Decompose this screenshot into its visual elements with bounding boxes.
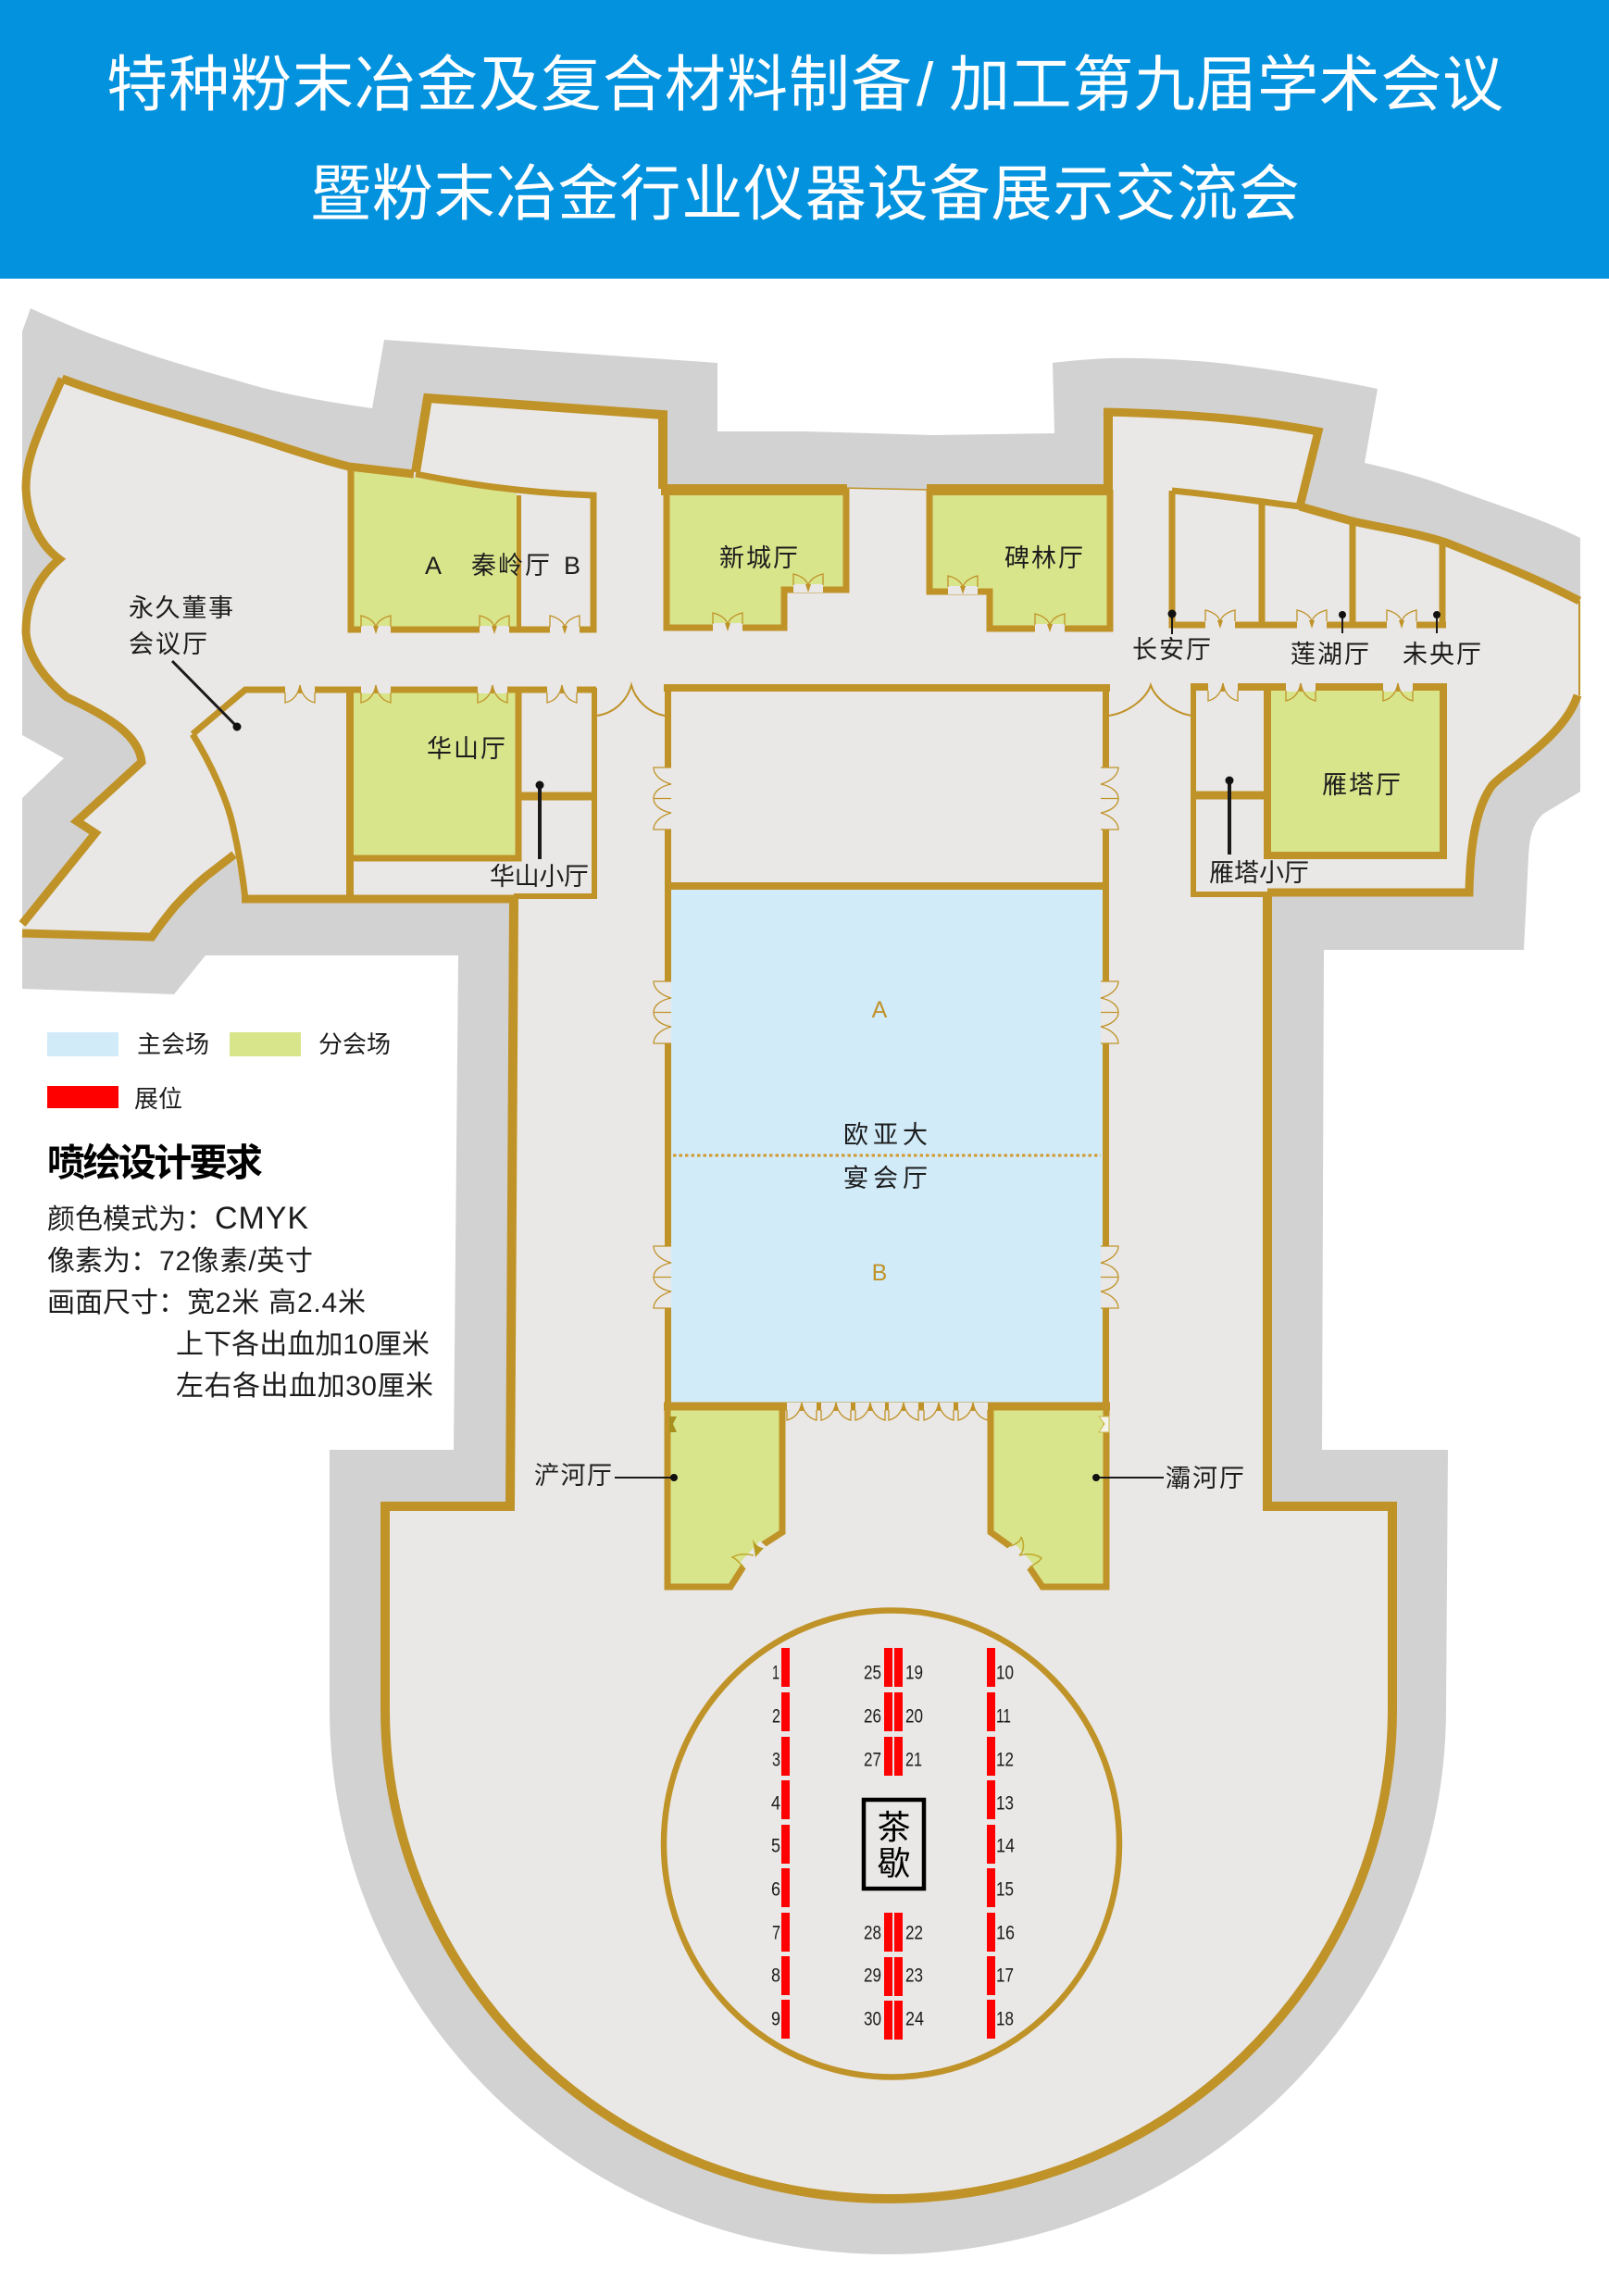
- room fill: 华山厅: [351, 688, 518, 856]
- label: 永久董事会议厅: 永久董事: [129, 594, 233, 622]
- label: 秦岭厅 A B: B: [564, 552, 580, 580]
- requirements list: 72像素/英寸: [159, 1246, 313, 1277]
- booth numbers: 21: [905, 1750, 922, 1770]
- booth numbers: 4: [771, 1792, 780, 1815]
- legend: breakout venue: 分会场: [318, 1030, 391, 1058]
- booth numbers: 14: [996, 1835, 1015, 1857]
- title line 1: 特种粉末冶金及复合材料制备: [106, 50, 912, 119]
- label: 浐河厅: 浐河厅: [534, 1462, 612, 1490]
- label: 华山小厅: 华山小厅: [490, 863, 589, 891]
- legend: main venue: [47, 1030, 209, 1058]
- booth numbers: 1: [772, 1663, 780, 1683]
- print requirements: [47, 1142, 433, 1402]
- room fill: 浐河厅: [667, 1406, 782, 1587]
- label: 永久董事会议厅: 会议厅: [129, 630, 207, 658]
- green breakout rooms: [351, 468, 1441, 1587]
- label: hall A: A: [872, 997, 888, 1023]
- exhibition booths: [781, 1648, 995, 2040]
- booth numbers: 18: [996, 2009, 1014, 2029]
- booth numbers: 15: [996, 1879, 1014, 1900]
- title line 1: 加工第九届学术会议: [949, 50, 1503, 119]
- swing doors: [285, 574, 1416, 1567]
- booth numbers: 12: [996, 1750, 1014, 1770]
- label: 灞河厅: 灞河厅: [1166, 1465, 1244, 1492]
- title line 1: [106, 50, 1503, 119]
- requirements list: [47, 1201, 433, 1402]
- label: 未央厅: 未央厅: [1403, 641, 1481, 668]
- booth column: 1-9: [781, 1648, 790, 2039]
- booth numbers: 19: [905, 1663, 923, 1683]
- label: 永久董事会议厅: [129, 594, 233, 658]
- legend: [47, 1030, 391, 1113]
- booth numbers: 8: [771, 1965, 780, 1987]
- legend: booth: 展位: [134, 1085, 182, 1113]
- room fill: 雁塔厅: [1267, 688, 1441, 855]
- requirements list: 画面尺寸：: [47, 1288, 186, 1318]
- booth numbers: 28: [864, 1922, 881, 1944]
- booth column: 25-30: [884, 1648, 892, 2040]
- label: 欧亚大宴会厅: [843, 1121, 928, 1192]
- booth numbers: 30: [864, 2009, 881, 2029]
- title line 1: /: [917, 50, 934, 119]
- label: 雁塔厅: 雁塔厅: [1322, 771, 1401, 799]
- booth numbers: 7: [772, 1922, 780, 1944]
- booth numbers: 22: [905, 1922, 923, 1944]
- legend: main venue: 主会场: [137, 1030, 209, 1058]
- room labels: [129, 544, 1481, 1492]
- booth numbers: 5: [771, 1835, 780, 1857]
- legend: breakout venue: [230, 1030, 391, 1058]
- dotted divider of banquet hall: [673, 1154, 1101, 1157]
- requirements list: 左右各出血加30厘米: [176, 1371, 433, 1402]
- label: 秦岭厅 A B: A: [425, 552, 442, 580]
- label: 华山厅: 华山厅: [427, 735, 505, 763]
- requirements list: 上下各出血加10厘米: [176, 1329, 430, 1360]
- label: 雁塔小厅: 雁塔小厅: [1209, 859, 1309, 887]
- booth column: 10-18: [987, 1648, 995, 2039]
- requirements list: 像素为：: [47, 1246, 158, 1277]
- booth numbers: 6: [771, 1879, 780, 1900]
- label: 秦岭厅 A B: [425, 552, 580, 580]
- label: 新城厅: 新城厅: [719, 544, 798, 572]
- requirements list: 颜色模式为：: [47, 1204, 214, 1235]
- booth numbers: 9: [771, 2009, 780, 2029]
- booth numbers: 3: [772, 1750, 780, 1770]
- booth numbers: 29: [864, 1965, 881, 1987]
- requirements list: 宽2米 高2.4米: [187, 1288, 366, 1318]
- booth numbers: [771, 1663, 1015, 2029]
- label: 莲湖厅: 莲湖厅: [1291, 641, 1369, 668]
- booth numbers: 16: [996, 1922, 1015, 1944]
- label: 碑林厅: 碑林厅: [1004, 544, 1083, 572]
- booth numbers: 24: [905, 2009, 924, 2029]
- leader lines: [172, 609, 1441, 1481]
- room fill: 秦岭厅 A: [351, 468, 517, 630]
- title banner: [0, 0, 1609, 279]
- room fill: 新城厅: [667, 489, 846, 628]
- label: 秦岭厅 A B: 秦岭厅: [471, 552, 550, 580]
- title line 2: 暨粉末冶金行业仪器设备展示交流会: [310, 159, 1300, 228]
- label: 长安厅: 长安厅: [1132, 636, 1211, 664]
- exhibition circle: [664, 1611, 1119, 2078]
- requirements list: CMYK: [215, 1201, 308, 1236]
- gold walls: [22, 379, 1579, 2199]
- booth numbers: 20: [905, 1705, 923, 1728]
- label: 欧亚大宴会厅: 欧亚大: [843, 1121, 928, 1149]
- booth numbers: 17: [996, 1965, 1014, 1987]
- tea break box: 歇: [877, 1844, 911, 1882]
- booth numbers: 13: [996, 1792, 1014, 1815]
- building floor: [22, 379, 1579, 2199]
- booth numbers: 25: [864, 1663, 881, 1683]
- tea break box: 茶: [877, 1808, 911, 1846]
- booth numbers: 23: [905, 1965, 923, 1987]
- legend: booth: [47, 1085, 182, 1113]
- booth numbers: 26: [864, 1705, 881, 1728]
- booth numbers: 11: [996, 1705, 1011, 1728]
- label: hall B: B: [872, 1260, 887, 1286]
- label: 欧亚大宴会厅: 宴会厅: [843, 1165, 928, 1192]
- booth numbers: 27: [864, 1750, 881, 1770]
- tea break box: [864, 1800, 924, 1889]
- booth numbers: 2: [772, 1705, 780, 1728]
- main banquet hall fill: [670, 889, 1105, 1404]
- room fill: 灞河厅: [991, 1406, 1106, 1587]
- booth column: 19-24: [894, 1648, 903, 2040]
- booth numbers: 10: [996, 1663, 1014, 1683]
- requirements heading: 喷绘设计要求: [47, 1142, 263, 1184]
- room fill: 碑林厅: [929, 490, 1110, 629]
